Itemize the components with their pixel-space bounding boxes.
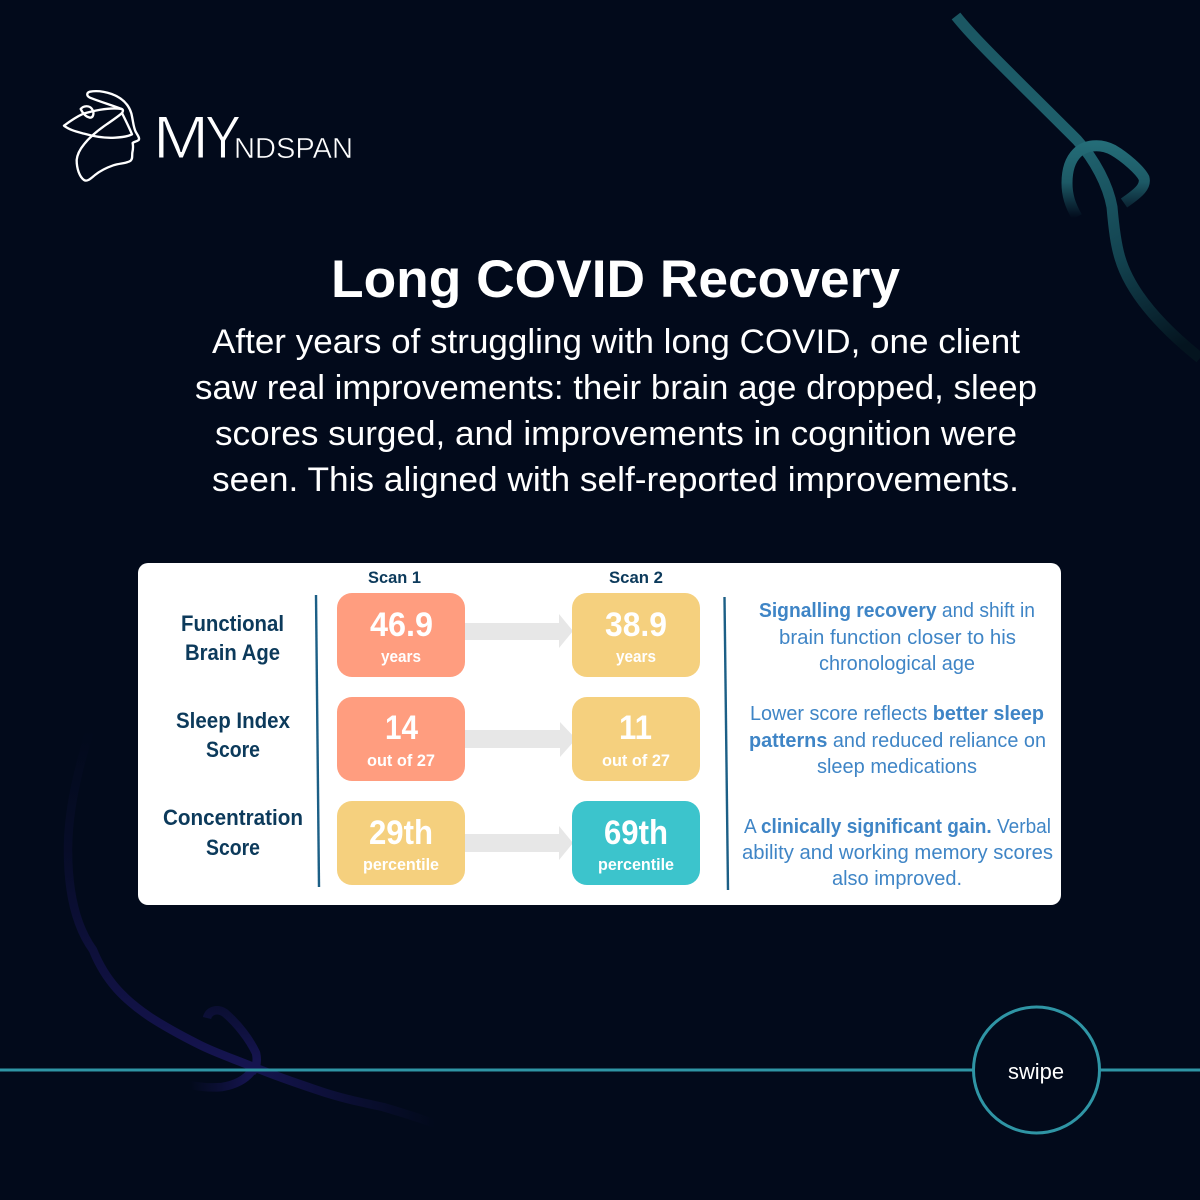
intro paragraph: saw real improvements: their brain age dropped, sleep (195, 369, 1037, 407)
card: sleep scan 2: out of 27 (602, 751, 670, 770)
card: concentration scan 1 (337, 801, 465, 885)
note: sleep (749, 703, 1046, 778)
note: sleep: sleep medications (817, 756, 977, 778)
note: brain age: brain function closer to his (779, 627, 1016, 649)
card: sleep scan 2: 11 (619, 709, 652, 747)
card: concentration scan 2 (572, 801, 700, 885)
intro paragraph: scores surged, and improvements in cognition were (215, 415, 1017, 453)
note: sleep: patterns and reduced reliance on (749, 730, 1046, 752)
card: sleep scan 1: out of 27 (367, 751, 435, 770)
card: concentration scan 1: 29th (369, 814, 433, 852)
card: brain age scan 2 (572, 593, 700, 677)
logo (64, 91, 353, 181)
card: sleep scan 2 (572, 697, 700, 781)
arrow: row 2 (465, 722, 576, 757)
column heading: Scan 1: Scan 1 (368, 568, 421, 587)
row label: Concentration Score: Score (206, 835, 260, 860)
intro paragraph: After years of struggling with long COVID, one client (212, 323, 1020, 361)
divider: left (316, 595, 319, 887)
intro paragraph: seen. This aligned with self-reported improvements. (212, 461, 1019, 499)
icon: head outline (64, 91, 139, 181)
intro paragraph (195, 323, 1037, 499)
card: brain age scan 1: years (381, 647, 421, 666)
logo wordmark: MY: Y (205, 104, 241, 171)
card: concentration scan 2: 69th (604, 814, 668, 852)
panel: results table (138, 563, 1061, 905)
logo wordmark: MY: M (153, 104, 209, 171)
note: concentration: also improved. (832, 868, 962, 890)
row label: Concentration Score: Concentration (163, 805, 303, 830)
logo wordmark: MY (153, 104, 241, 171)
note: concentration: A clinically significant gain. Verbal (744, 816, 1051, 838)
card: brain age scan 2: 38.9 (605, 606, 667, 644)
card: sleep scan 1 (337, 697, 465, 781)
row label: Functional Brain Age (181, 611, 284, 665)
card: sleep scan 1: 14 (385, 709, 418, 747)
note: brain age: chronological age (819, 653, 975, 675)
row label: Sleep Index Score: Sleep Index (176, 708, 291, 733)
column heading: Scan 2: Scan 2 (609, 568, 663, 587)
card: concentration scan 2: percentile (598, 855, 674, 874)
swipe line (0, 1068, 1200, 1072)
row label: Concentration Score (163, 805, 303, 860)
swipe button (974, 1007, 1100, 1133)
row label: Functional Brain Age: Brain Age (185, 640, 280, 665)
divider: right (724, 597, 728, 890)
row label: Sleep Index Score: Score (206, 737, 260, 762)
note: sleep: Lower score reflects better sleep (750, 703, 1044, 725)
card: brain age scan 1 (337, 593, 465, 677)
swipe button: swipe (1008, 1059, 1064, 1084)
note: brain age: Signalling recovery and shift in (759, 600, 1035, 622)
card: brain age scan 1: 46.9 (370, 606, 433, 644)
logo wordmark: NDSPAN: NDSPAN (234, 133, 353, 165)
arrow: row 1 (465, 614, 573, 648)
arrow: row 3 (465, 826, 573, 860)
card: concentration scan 1: percentile (363, 855, 439, 874)
row label: Sleep Index Score (176, 708, 291, 762)
note: concentration: ability and working memory scores (742, 842, 1053, 864)
note: concentration (742, 816, 1053, 890)
row label: Functional Brain Age: Functional (181, 611, 284, 636)
title: Long COVID Recovery (331, 250, 901, 309)
note: brain age (759, 600, 1035, 675)
decorative ribbon: top right (956, 16, 1200, 358)
card: brain age scan 2: years (616, 647, 656, 666)
decorative ribbon: bottom left (68, 730, 435, 1124)
